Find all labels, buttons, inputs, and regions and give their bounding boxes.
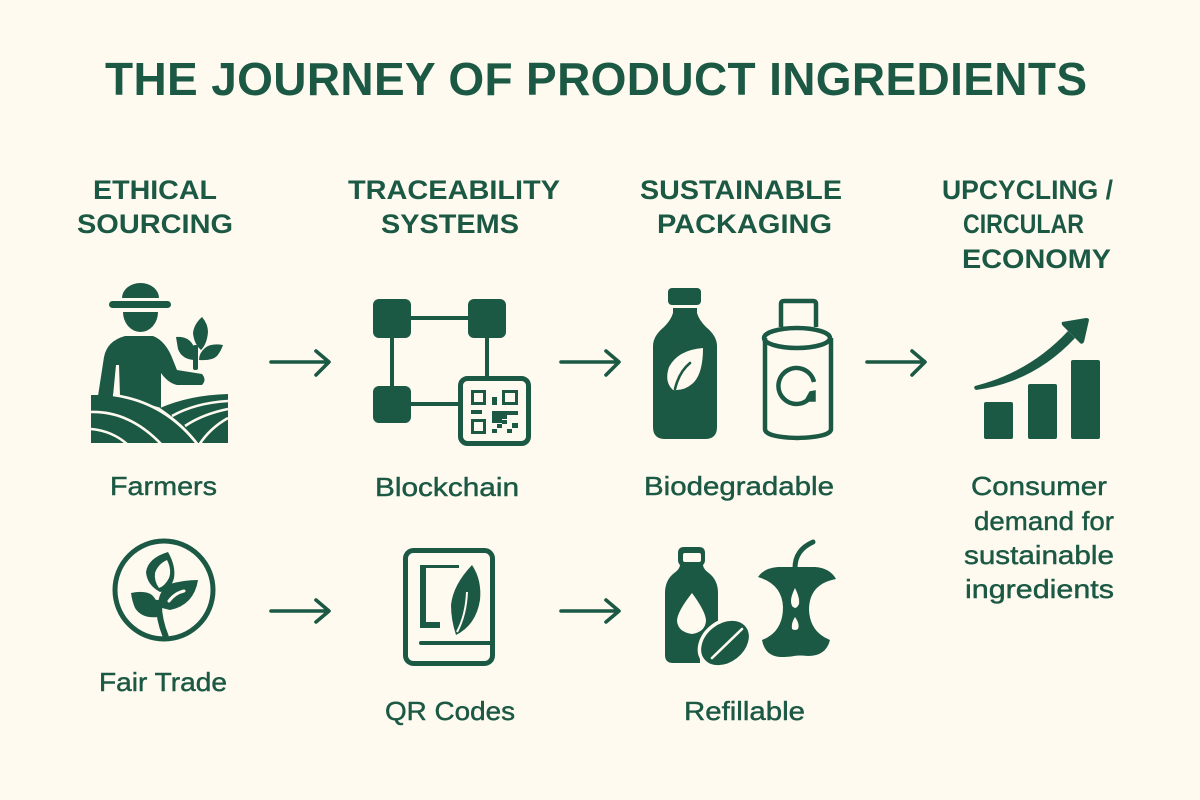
label: farmers: Farmers [110,471,217,501]
icon: QR code book [406,550,492,664]
arrow 4 [271,600,329,622]
label: consumer demand: demand for [974,506,1114,536]
icon: growth chart [974,318,1100,439]
title: THE JOURNEY OF PRODUCT INGREDIENTS [105,53,1087,105]
heading: sustainable packaging [640,175,842,239]
arrow 3 [867,351,925,375]
label: blockchain: Blockchain [375,472,519,502]
heading: traceability systems: TRACEABILITY [348,175,560,205]
heading: upcycling / circular economy: CIRCULAR [963,209,1084,239]
icon: biodegradable bottle [653,288,717,439]
arrow 2 [561,351,619,375]
icon: fair trade [115,541,213,639]
icon: recyclable can [764,301,831,438]
arrow 1 [271,351,329,375]
label: biodegradable: Biodegradable [644,471,834,501]
label: refillable: Refillable [684,696,805,726]
heading: sustainable packaging: PACKAGING [657,209,832,239]
heading: sustainable packaging: SUSTAINABLE [640,175,842,205]
icon: farmer [91,283,228,445]
heading: upcycling / circular economy: ECONOMY [962,244,1111,274]
icon: apple core [758,542,836,657]
label: consumer demand: sustainable [964,540,1114,570]
heading: upcycling / circular economy: UPCYCLING / [942,175,1113,205]
label: consumer demand [964,471,1114,604]
label: fair trade: Fair Trade [99,667,227,697]
icon: refill bottle and bean [665,547,760,677]
heading: ethical sourcing [77,175,233,239]
heading: traceability systems [348,175,560,239]
label: consumer demand: Consumer [971,471,1107,501]
heading: upcycling / circular economy [942,175,1113,274]
arrow 5 [561,600,619,622]
label: consumer demand: ingredients [965,574,1114,604]
heading: traceability systems: SYSTEMS [381,209,519,239]
icon: blockchain [373,299,528,444]
heading: ethical sourcing: ETHICAL [93,175,217,205]
label: QR codes: QR Codes [385,696,515,726]
heading: ethical sourcing: SOURCING [77,209,233,239]
